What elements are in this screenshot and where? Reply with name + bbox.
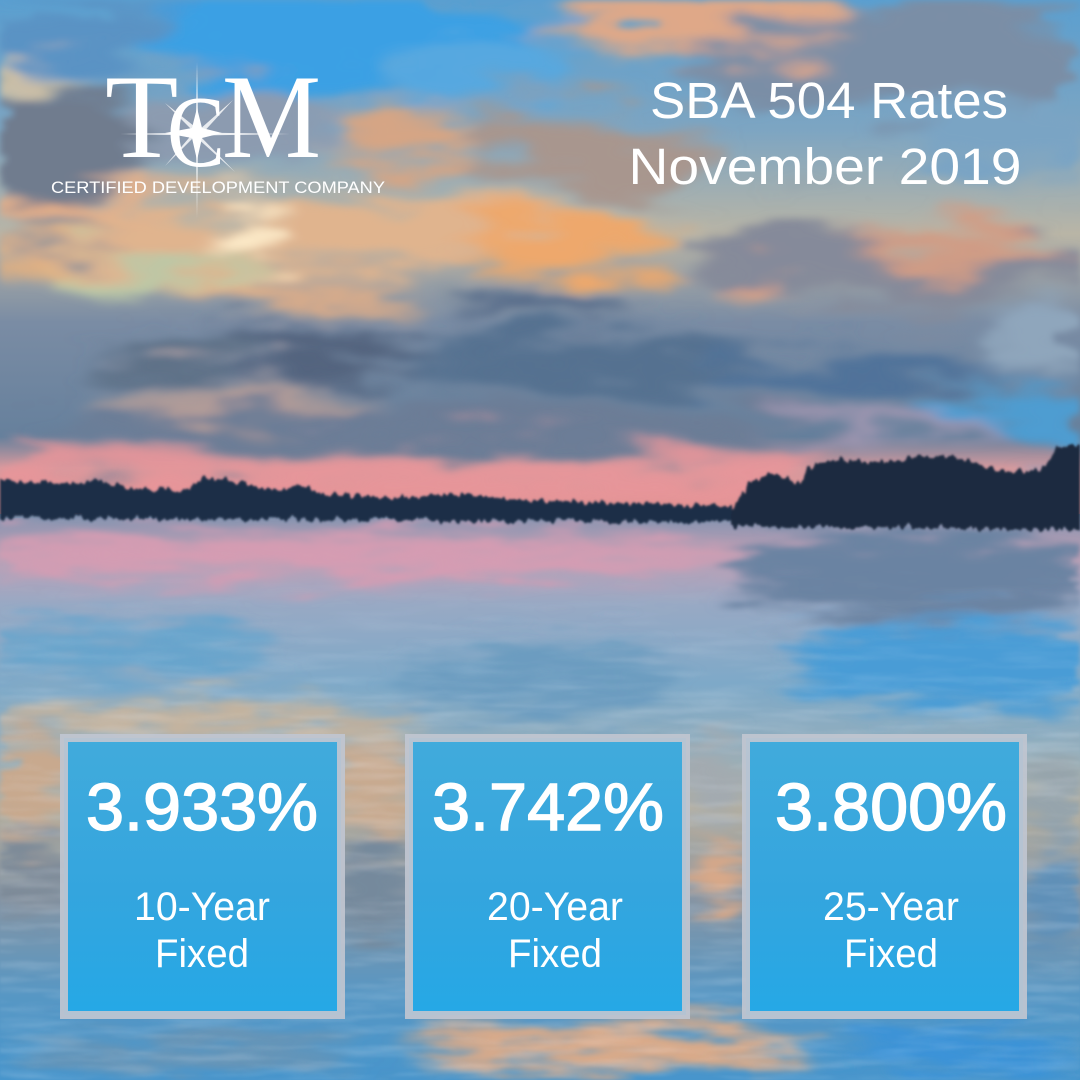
panel: 25-year rate: [746, 738, 1023, 1015]
term label: 25-Year: [823, 885, 959, 929]
rate value: 3.933%: [86, 770, 318, 845]
term label: Fixed: [508, 932, 602, 976]
logo letters: T: [105, 50, 178, 183]
logo letters: [105, 50, 321, 189]
term label: 20-Year: [487, 885, 623, 929]
background: lake reflection: [0, 514, 1080, 1080]
background: sunset sky: [0, 0, 1080, 520]
logo: TCM Certified Development Company: [51, 50, 385, 218]
term label: 10-Year: [134, 885, 270, 929]
term label: [823, 885, 959, 976]
logo letters: M: [222, 50, 321, 183]
title: [628, 72, 1022, 195]
term label: Fixed: [844, 932, 938, 976]
rate value: 3.800%: [775, 770, 1007, 845]
term label: Fixed: [155, 932, 249, 976]
panel: 20-year rate: [409, 738, 686, 1015]
background: tree line on the horizon: [0, 444, 1080, 530]
rate value: 3.742%: [432, 770, 664, 845]
title: November 2019: [628, 138, 1022, 195]
title: SBA 504 Rates: [650, 72, 1008, 129]
logo letters: C: [167, 76, 225, 189]
logo tagline: CERTIFIED DEVELOPMENT COMPANY: [51, 179, 385, 197]
pink horizon glow: [0, 458, 800, 506]
logo star: [120, 62, 290, 218]
term label: [487, 885, 623, 976]
term label: [134, 885, 270, 976]
panel: 10-year rate: [64, 738, 341, 1015]
